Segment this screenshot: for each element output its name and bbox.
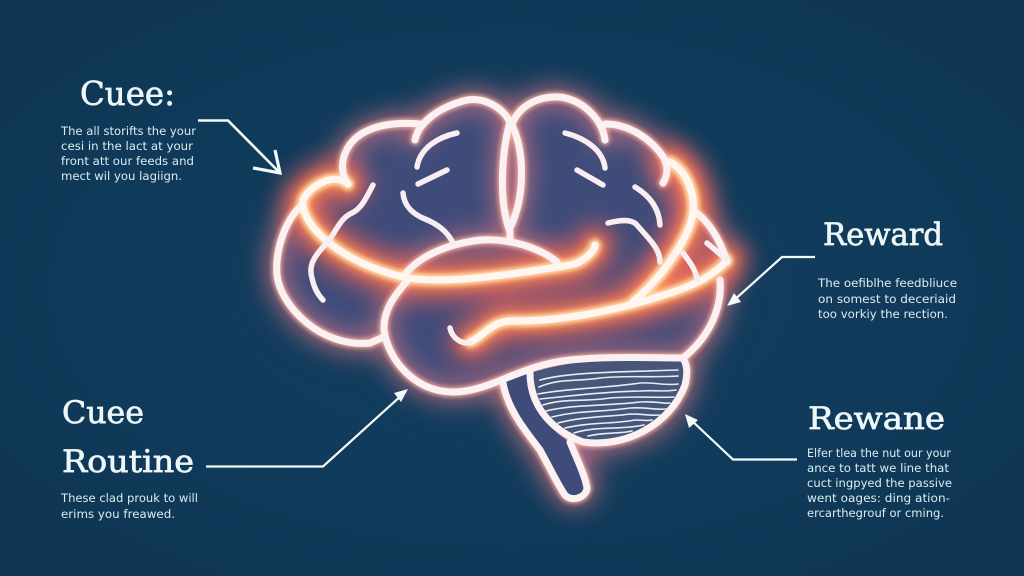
brain illustration bbox=[276, 97, 727, 499]
text block: reward description bbox=[817, 276, 957, 321]
heading: Cuee: Cuee: bbox=[80, 74, 175, 113]
brain silhouette fill bbox=[276, 97, 727, 499]
text block: cue description: front att our feeds and bbox=[61, 154, 194, 168]
outline glow bbox=[277, 97, 727, 499]
text block: rewane description bbox=[807, 446, 952, 520]
glowing bands bbox=[303, 162, 727, 342]
cerebellum fill bbox=[530, 358, 687, 443]
callout: routine bottom-left bbox=[60, 389, 408, 521]
callout: rewane bottom-right bbox=[685, 401, 952, 520]
arrow: rewane to brain bbox=[685, 414, 797, 460]
brain soft halo bbox=[276, 97, 727, 499]
text block: cue description bbox=[60, 124, 196, 183]
band tight glow bbox=[303, 162, 727, 342]
callout: reward right bbox=[727, 217, 957, 321]
arrow: routine to brain bbox=[206, 389, 408, 466]
callout: cue top-left bbox=[60, 74, 280, 183]
text block: rewane description: ercarthegrouf or cming. bbox=[807, 506, 944, 520]
text block: routine description: erims you freawed. bbox=[61, 507, 175, 521]
band wide red glow bbox=[303, 162, 727, 342]
text block: reward description: on somest to deceriaid bbox=[818, 292, 956, 306]
inner folds bbox=[311, 133, 727, 343]
stem fill bbox=[503, 373, 587, 499]
text block: cue description: cesi in the lact at your bbox=[61, 139, 193, 153]
arrow: reward to brain bbox=[727, 257, 815, 306]
heading: Routine: Routine bbox=[62, 444, 194, 480]
heading: Rewane: Rewane bbox=[808, 401, 945, 437]
outline tight glow bbox=[277, 97, 727, 499]
text block: rewane description: Elfer tlea the nut our your bbox=[807, 446, 951, 460]
text block: reward description: too vorkiy the rection. bbox=[818, 307, 948, 321]
text block: rewane description: cuct ingpyed the passive bbox=[807, 476, 952, 490]
heading: Reward: Reward bbox=[823, 217, 943, 253]
arrow: cue to brain bbox=[198, 120, 280, 173]
cerebellum stripes bbox=[538, 370, 678, 436]
brain outline strokes bbox=[277, 97, 727, 499]
text block: rewane description: went oages: ding ation- bbox=[807, 491, 950, 505]
band orange glow bbox=[303, 162, 727, 342]
heading: Cuee: Cuee bbox=[62, 395, 144, 431]
text block: cue description: The all storifts the your bbox=[60, 124, 196, 138]
text block: routine description: These clad prouk to will bbox=[60, 491, 198, 505]
text block: rewane description: ance to tatt we line that bbox=[807, 461, 950, 475]
text block: routine description bbox=[60, 491, 198, 521]
text block: reward description: The oefiblhe feedbliuce bbox=[817, 276, 957, 290]
text block: cue description: mect wil you lagiign. bbox=[61, 169, 182, 183]
